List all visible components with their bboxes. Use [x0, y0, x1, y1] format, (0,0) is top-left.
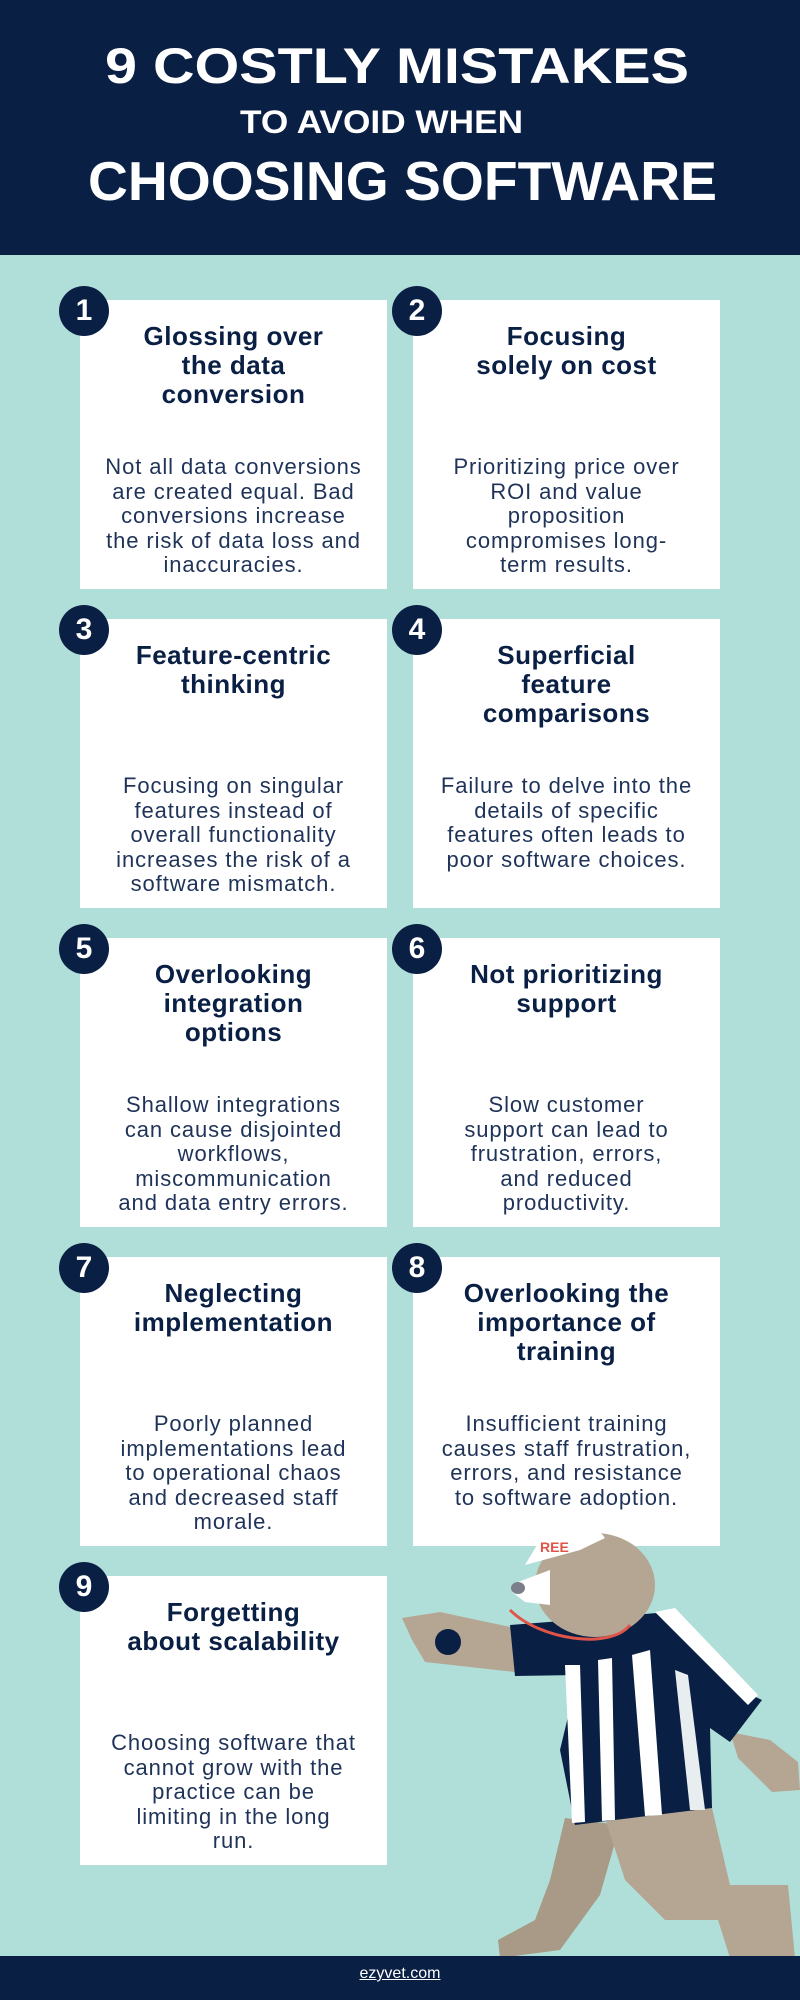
right arm: [730, 1732, 800, 1792]
card 2: compromises long-: [466, 528, 667, 552]
card 3: [80, 619, 387, 908]
card 8: to software adoption.: [455, 1484, 678, 1510]
card 6: support can lead to: [464, 1116, 669, 1142]
card 9: Choosing software that: [111, 1730, 356, 1755]
header: [0, 0, 800, 255]
footer: [0, 1956, 800, 2000]
card 9: limiting in the long: [136, 1804, 331, 1828]
card 5: can cause disjointed: [125, 1116, 342, 1142]
card 8: causes staff frustration,: [442, 1436, 691, 1460]
card 2: Focusing: [507, 321, 626, 351]
number badge 2: 2: [409, 294, 425, 327]
card 2: Prioritizing price over: [453, 454, 680, 479]
card 4: comparisons: [483, 698, 650, 728]
number badge 7: 7: [76, 1251, 92, 1284]
card 9: practice can be: [152, 1779, 315, 1804]
card 1: are created equal. Bad: [112, 478, 355, 504]
card 9: Forgetting: [167, 1597, 300, 1627]
number badge 3: 3: [76, 613, 92, 646]
card 7: and decreased staff: [129, 1484, 338, 1510]
card 1: Not all data conversions: [105, 454, 362, 479]
number badge 1: 1: [76, 294, 92, 327]
card 4: poor software choices.: [447, 846, 686, 872]
card 2: term results.: [500, 552, 633, 577]
card 6: frustration, errors,: [471, 1141, 662, 1166]
card 7: to operational chaos: [125, 1460, 342, 1485]
number badge 6: 6: [409, 932, 425, 965]
card 8: importance of: [477, 1307, 656, 1337]
card 2: ROI and value: [490, 478, 643, 504]
number badge 5: [59, 924, 109, 974]
card 8: Insufficient training: [466, 1411, 667, 1436]
footer: ezyvet.com: [360, 1965, 440, 1982]
card 1: [80, 300, 387, 589]
number badge 5: 5: [76, 932, 92, 965]
card 2: [413, 300, 720, 589]
number badge 8: 8: [409, 1251, 425, 1284]
card 4: Superficial: [497, 640, 636, 670]
card 5: [80, 938, 387, 1227]
card 6: Slow customer: [489, 1092, 644, 1117]
card 5: miscommunication: [135, 1166, 332, 1190]
number badge 2: [392, 286, 442, 336]
head: [535, 1533, 655, 1637]
card 5: integration: [164, 988, 303, 1018]
number badge 4: [392, 605, 442, 655]
icon: referee bear: [402, 1533, 800, 1956]
number badge 6: [392, 924, 442, 974]
card 6: productivity.: [503, 1190, 630, 1215]
card 2: proposition: [508, 503, 625, 528]
card 9: cannot grow with the: [124, 1754, 343, 1780]
card 1: inaccuracies.: [163, 552, 304, 577]
card 8: training: [517, 1336, 616, 1366]
card 3: Focusing on singular: [123, 773, 344, 798]
number badge 3: [59, 605, 109, 655]
card 1: Glossing over: [144, 321, 323, 351]
number badge 1: [59, 286, 109, 336]
card 5: and data entry errors.: [118, 1190, 349, 1215]
card 9: run.: [213, 1828, 254, 1853]
card 4: details of specific: [474, 798, 659, 822]
title: CHOOSING SOFTWARE: [88, 150, 717, 212]
number badge 4: 4: [409, 613, 425, 646]
card 6: Not prioritizing: [470, 959, 663, 989]
card 7: morale.: [194, 1509, 273, 1534]
card 7: Neglecting: [165, 1278, 302, 1308]
card 3: features instead of: [134, 798, 333, 822]
card 3: increases the risk of a: [116, 846, 351, 872]
title: 9 COSTLY MISTAKES: [105, 38, 689, 94]
card 4: [413, 619, 720, 908]
card 5: Overlooking: [155, 959, 312, 989]
card 6: and reduced: [500, 1166, 633, 1190]
card 1: conversion: [162, 379, 305, 409]
card 5: options: [185, 1017, 282, 1047]
left arm: [402, 1612, 515, 1672]
card 6: support: [516, 988, 617, 1018]
card 5: Shallow integrations: [126, 1092, 341, 1117]
title: [88, 38, 717, 212]
card 1: the data: [182, 350, 285, 380]
card 8: errors, and resistance: [450, 1460, 683, 1485]
card 5: workflows,: [178, 1141, 289, 1166]
number badge 8: [392, 1243, 442, 1293]
number badge 9: 9: [76, 1570, 92, 1603]
card 9: [80, 1576, 387, 1865]
card 4: feature: [521, 669, 612, 699]
title: TO AVOID WHEN: [240, 104, 523, 140]
card 1: conversions increase: [121, 503, 346, 528]
back leg: [498, 1818, 620, 1958]
card 7: [80, 1257, 387, 1546]
card 4: features often leads to: [447, 822, 686, 847]
card 3: overall functionality: [130, 822, 336, 847]
card 3: Feature-centric: [136, 640, 331, 670]
card 8: Overlooking the: [464, 1278, 669, 1308]
number badge 7: [59, 1243, 109, 1293]
card 1: the risk of data loss and: [106, 528, 361, 552]
shirt: [510, 1612, 762, 1825]
card 3: thinking: [181, 669, 286, 699]
card 7: implementation: [134, 1307, 333, 1337]
card 7: implementations lead: [121, 1436, 346, 1460]
number badge 9: [59, 1562, 109, 1612]
front leg: [605, 1808, 795, 1958]
card 2: solely on cost: [476, 350, 657, 380]
cap: [525, 1523, 605, 1565]
card 4: Failure to delve into the: [441, 773, 692, 798]
card 7: Poorly planned: [154, 1411, 313, 1436]
card 6: [413, 938, 720, 1227]
card 3: software mismatch.: [131, 871, 336, 896]
card 8: [413, 1257, 720, 1546]
card 9: about scalability: [127, 1626, 340, 1656]
icon: referee bear: REE: [540, 1539, 569, 1555]
